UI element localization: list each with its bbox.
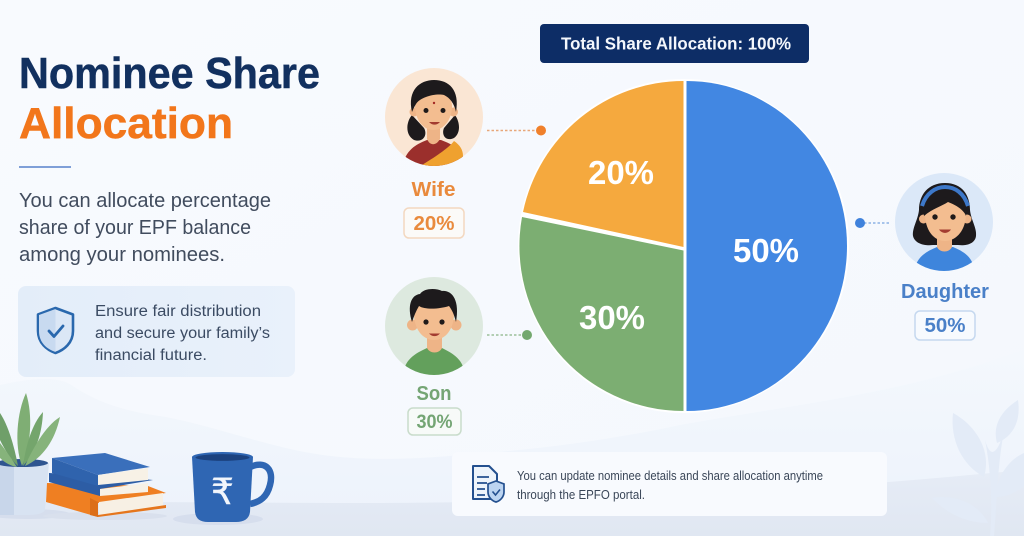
callout text: Ensure fair distribution <box>95 303 261 320</box>
slice: daughter 50% <box>686 81 847 411</box>
note text: You can update nominee details and share allocation anytime <box>517 468 823 483</box>
icon: shield <box>38 308 73 353</box>
slice: daughter 50%: 50% <box>733 232 799 269</box>
nominee: daughter <box>855 173 993 340</box>
nominee: wife <box>385 68 546 238</box>
icon: rupee symbol: ₹ <box>211 472 234 513</box>
percentage: son <box>408 408 461 435</box>
orange book <box>46 483 166 517</box>
intro text: You can allocate percentage <box>19 190 271 212</box>
decorative leaves <box>932 400 1024 536</box>
note text: through the EPFO portal. <box>517 487 645 502</box>
label: son: Son <box>416 383 452 405</box>
illustration: stack of books <box>43 453 167 520</box>
slice: wife 20%: 20% <box>588 154 654 191</box>
slice: son 30% <box>519 217 684 411</box>
icon: son avatar <box>403 289 465 376</box>
label: daughter: Daughter <box>901 281 989 303</box>
badge: total share allocation <box>540 24 809 63</box>
title: Nominee Share <box>19 49 320 98</box>
intro text: among your nominees. <box>19 244 225 266</box>
percentage: son: 30% <box>416 412 453 433</box>
middle book <box>49 473 153 496</box>
pie chart <box>518 79 849 413</box>
intro text: share of your EPF balance <box>19 217 251 239</box>
icon: document with shield <box>473 466 504 502</box>
badge: total share allocation: Total Share Allocation: 100% <box>561 34 791 54</box>
label: wife: Wife <box>412 179 456 201</box>
intro text <box>19 190 271 266</box>
slice: son 30%: 30% <box>579 299 645 336</box>
illustration: potted plant <box>0 393 70 519</box>
note text <box>517 468 823 502</box>
callout text <box>95 303 270 364</box>
top book <box>52 453 150 475</box>
title: Allocation <box>19 99 233 148</box>
connector: daughter <box>855 218 890 228</box>
callout text: and secure your family’s <box>95 325 270 342</box>
percentage: wife <box>404 208 464 238</box>
illustration: rupee mug <box>173 452 271 525</box>
panel: fair distribution callout <box>18 286 295 377</box>
title <box>19 49 320 148</box>
icon: daughter avatar <box>913 183 976 274</box>
icon: wife avatar <box>406 80 463 166</box>
percentage: daughter: 50% <box>924 315 966 337</box>
panel: EPFO portal note <box>452 452 887 516</box>
slice: wife 20% <box>523 81 684 247</box>
callout text: financial future. <box>95 347 207 364</box>
percentage: wife: 20% <box>414 213 455 235</box>
percentage: daughter <box>915 311 975 340</box>
nominee: son <box>385 277 532 435</box>
connector: wife <box>487 126 546 136</box>
connector: son <box>487 330 532 340</box>
